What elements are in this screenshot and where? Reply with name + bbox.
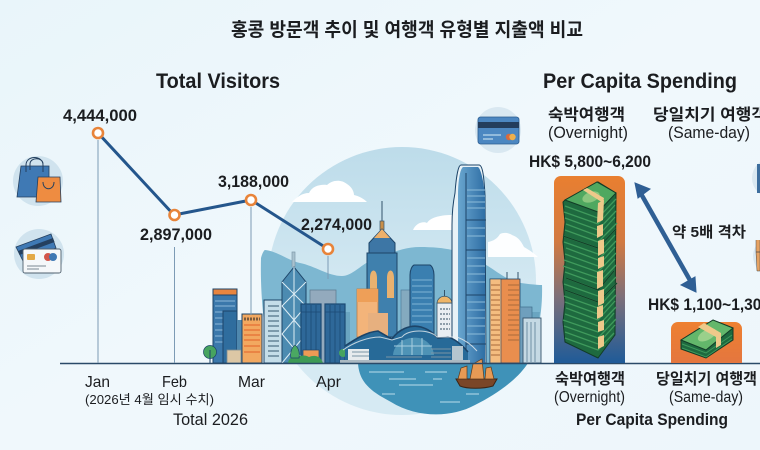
month labels bbox=[85, 374, 342, 391]
IFC tower bbox=[452, 165, 486, 363]
trend line bbox=[98, 133, 328, 249]
tower E bbox=[381, 201, 383, 221]
value: Mar: 3,188,000 bbox=[218, 173, 289, 191]
axis baseline bbox=[60, 362, 760, 364]
bottom label: same-day: (Same-day) bbox=[669, 389, 743, 406]
axis caption: total 2026: Total 2026 bbox=[173, 411, 248, 429]
glass towers bbox=[301, 304, 321, 363]
icon: payment card bbox=[475, 107, 521, 153]
heading: total visitors: Total Visitors bbox=[156, 69, 280, 93]
title: 홍콩 방문객 추이 및 여행객 유형별 지출액 비교 bbox=[231, 19, 583, 41]
point: Mar bbox=[246, 195, 256, 205]
bottom label: same-day bbox=[656, 370, 757, 406]
month labels: Jan bbox=[85, 374, 110, 391]
bottom label: overnight: (Overnight) bbox=[554, 389, 625, 406]
illustration: Hong Kong skyline bbox=[204, 147, 542, 415]
month labels: Mar bbox=[238, 374, 266, 391]
Bank of China tower bbox=[292, 252, 295, 267]
arrow: spending gap bbox=[635, 183, 696, 292]
note: provisional figures: (2026년 4월 임시 수치) bbox=[85, 392, 214, 407]
bar: same-day spending with cash bbox=[671, 320, 742, 363]
convention centre bbox=[345, 326, 468, 360]
icon: credit cards bbox=[14, 229, 64, 279]
column heading: same-day: (Same-day) bbox=[668, 124, 750, 142]
harbour water bbox=[358, 363, 528, 414]
icon: cropped right edge cutlery bottom bbox=[753, 237, 760, 275]
month labels: Apr bbox=[316, 374, 342, 391]
point: Feb bbox=[170, 210, 180, 220]
icon: cropped right edge cutlery top bbox=[752, 158, 760, 198]
orange blocks bbox=[357, 289, 378, 337]
back grey tower bbox=[310, 290, 336, 363]
bottom label: overnight bbox=[554, 370, 625, 406]
bottom label: same-day: 당일치기 여행객 bbox=[656, 370, 757, 388]
domed building H bbox=[437, 303, 452, 340]
junk boat bbox=[456, 379, 497, 388]
value: Jan: 4,444,000 bbox=[63, 107, 137, 125]
bottom label: overnight: 숙박여행객 bbox=[555, 370, 625, 388]
heading: per capita spending: Per Capita Spending bbox=[543, 69, 737, 93]
column heading: overnight: (Overnight) bbox=[548, 124, 628, 142]
orange towers I bbox=[490, 279, 520, 363]
axis caption: per capita spending: Per Capita Spending bbox=[576, 410, 728, 429]
callout: about five times gap: 약 5배 격차 bbox=[672, 224, 746, 241]
column heading: overnight bbox=[548, 105, 628, 142]
trees bbox=[288, 356, 323, 363]
building C bbox=[264, 300, 283, 363]
month labels: Feb bbox=[162, 374, 187, 391]
drop lines bbox=[98, 140, 328, 363]
bar: overnight spending with cash stack bbox=[554, 176, 625, 363]
building B bbox=[242, 314, 262, 363]
grey towers J bbox=[520, 307, 532, 363]
tower G bbox=[401, 290, 410, 335]
value: overnight spending: HK$ 5,800~6,200 bbox=[529, 153, 651, 171]
column heading: same-day: 당일치기 여행객 bbox=[653, 105, 760, 124]
icon: shopping bags bbox=[13, 156, 63, 206]
point: Apr bbox=[323, 244, 333, 254]
point: Jan bbox=[93, 128, 103, 138]
value: Apr: 2,274,000 bbox=[301, 216, 372, 234]
column heading: same-day bbox=[653, 105, 760, 142]
column heading: overnight: 숙박여행객 bbox=[548, 105, 625, 124]
building A bbox=[213, 289, 237, 363]
line chart: monthly visitors bbox=[60, 107, 760, 391]
value: Feb: 2,897,000 bbox=[140, 226, 212, 244]
